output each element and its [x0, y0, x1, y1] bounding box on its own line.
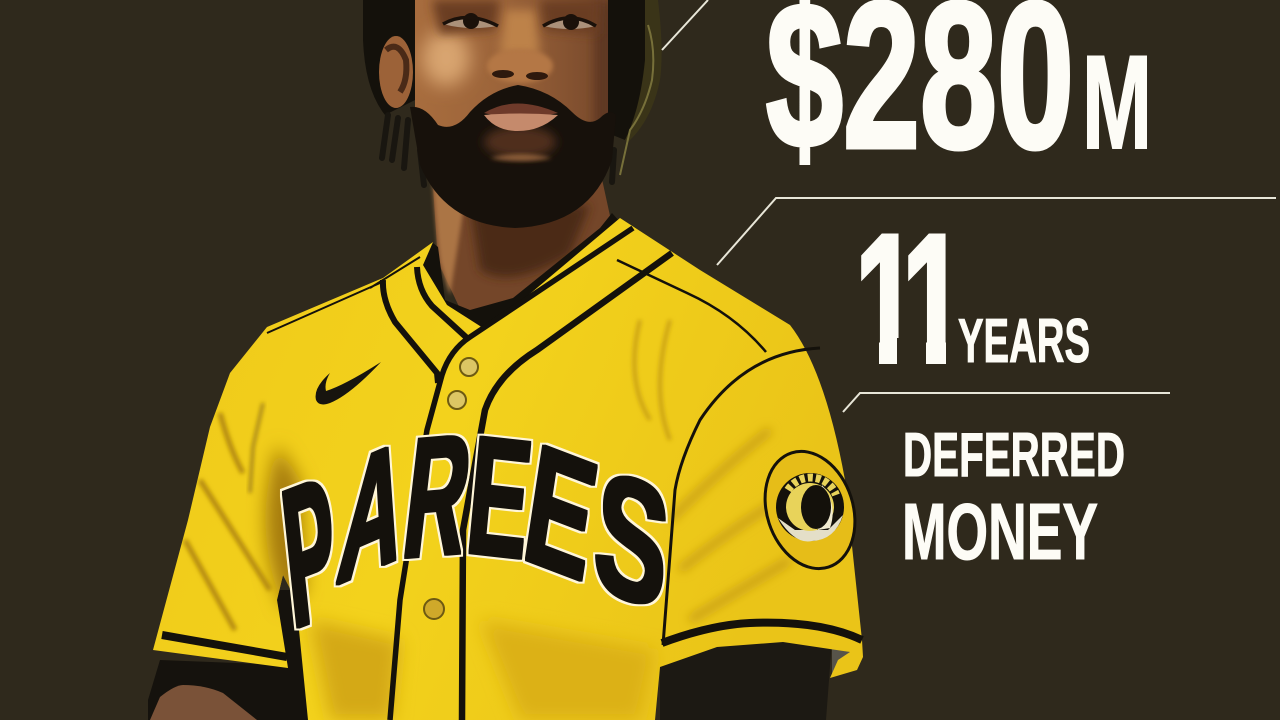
- stat: deferred money: [902, 421, 1125, 576]
- jersey lettering: [274, 397, 676, 671]
- callout line: top: [662, 0, 708, 50]
- stat: contract length: 11: [855, 196, 965, 404]
- beard: [410, 85, 616, 228]
- chin patch: [484, 126, 556, 161]
- jersey lettering: A: [331, 399, 415, 622]
- jersey lettering: S: [588, 431, 676, 648]
- helmet and hair: [363, 0, 662, 175]
- stat: contract length: YEARS: [958, 307, 1090, 376]
- buttons: [424, 358, 478, 619]
- ear: [379, 36, 413, 108]
- undershirt collar: [423, 213, 620, 328]
- jersey lettering: P: [274, 434, 346, 671]
- sleeve patch: [751, 440, 869, 580]
- callout line: years: [717, 198, 1276, 265]
- face: [415, 0, 608, 127]
- stat: contract length: [861, 234, 1089, 364]
- callout line: deferred: [843, 393, 1170, 412]
- jersey folds: [185, 320, 790, 720]
- jersey lettering: E: [515, 409, 607, 617]
- swoosh logo: [316, 362, 381, 404]
- forearm: [150, 685, 257, 720]
- player illustration: [148, 0, 869, 720]
- neck: [432, 170, 612, 330]
- side shadow: [591, 0, 608, 122]
- undershirt sleeve left: [148, 590, 310, 720]
- nose: [487, 49, 553, 83]
- stat: contract value: M: [1082, 29, 1152, 177]
- undershirt sleeve right: [660, 640, 832, 720]
- eyes: [443, 13, 596, 30]
- right sleeve cuff stripe: [662, 623, 862, 643]
- nose bridge: [500, 10, 540, 55]
- eye socket shadow: [432, 0, 600, 34]
- collar and placket piping: [267, 228, 820, 720]
- jersey lettering: E: [461, 399, 539, 595]
- stat: deferred money: MONEY: [902, 487, 1098, 576]
- jersey body: [153, 218, 863, 720]
- mouth: [484, 104, 558, 131]
- inner cuff: [832, 648, 858, 676]
- left sleeve cuff stripe: [162, 635, 287, 657]
- dreadlocks: [382, 115, 614, 185]
- stat: deferred money: DEFERRED: [903, 421, 1125, 490]
- cheek highlight: [422, 30, 470, 86]
- jersey lettering: R: [396, 397, 480, 595]
